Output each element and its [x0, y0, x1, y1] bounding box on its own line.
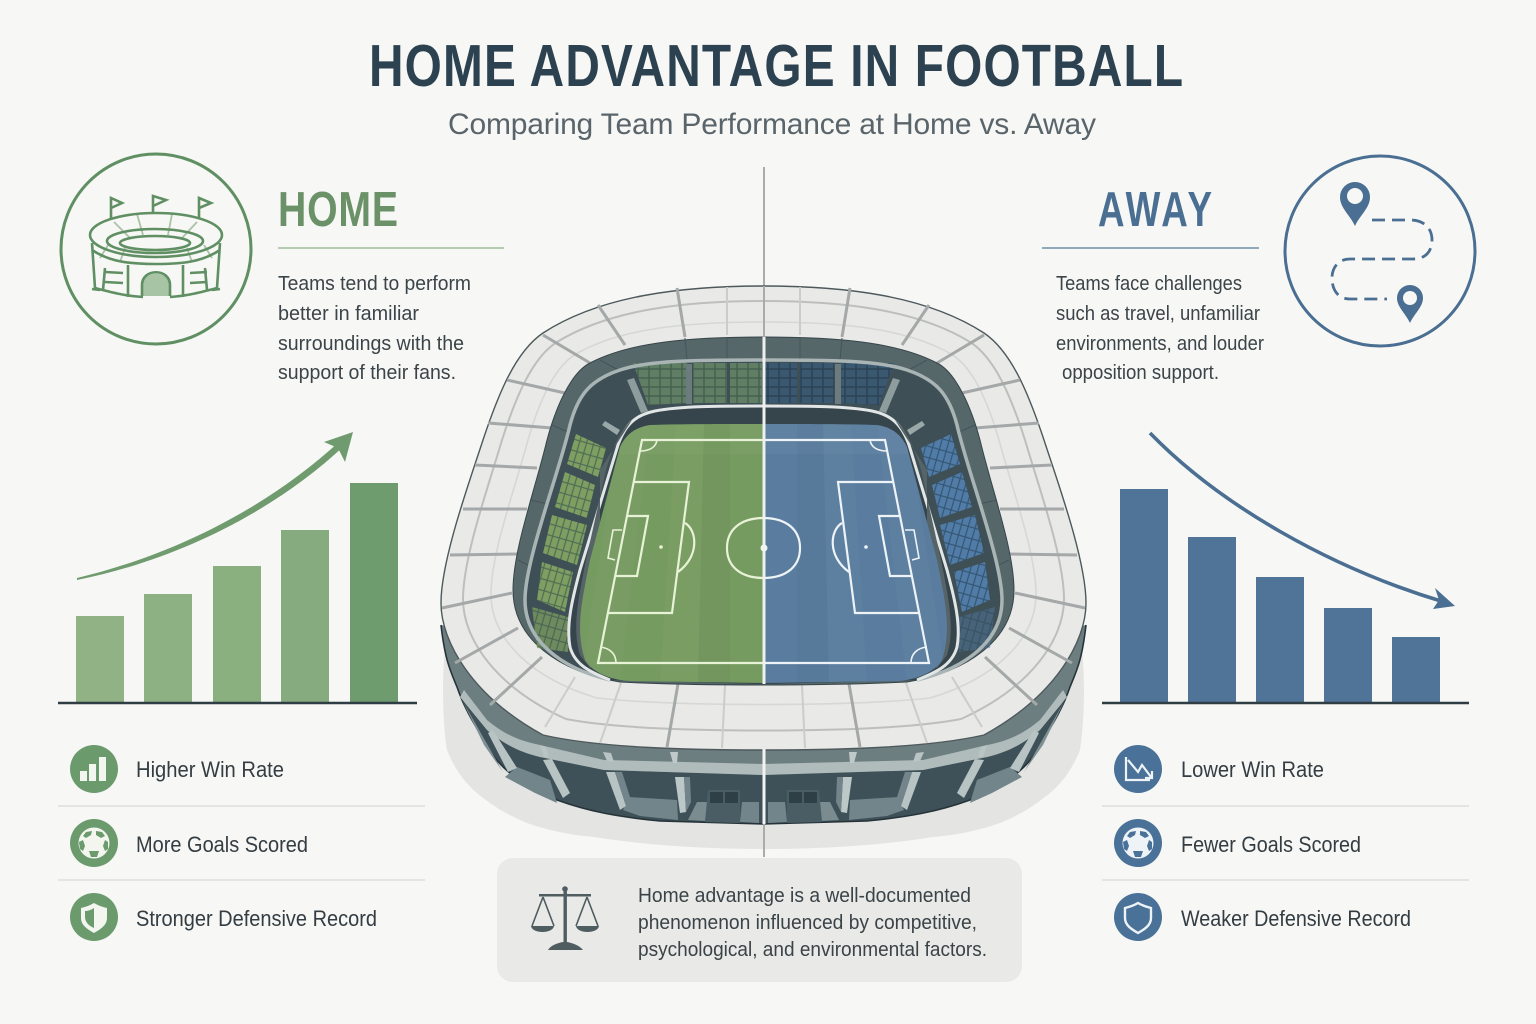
bar chart: rising home performance: [58, 483, 417, 703]
panel: stadium illustration: [441, 286, 1086, 857]
label: weaker defense: Weaker Defensive Record: [1181, 906, 1411, 931]
list: home stats: [58, 745, 425, 941]
label: more goals: More Goals Scored: [136, 832, 308, 857]
text: away description: such as travel, unfamiliar: [1056, 303, 1260, 325]
blue away half of pitch: [757, 424, 947, 684]
heading: away: AWAY: [1098, 183, 1212, 237]
green home seating: [532, 363, 762, 652]
text: summary: phenomenon influenced by competitive,: [638, 912, 977, 934]
text: summary: psychological, and environmental factors.: [638, 939, 987, 961]
arrow: falling trend: [1150, 433, 1455, 609]
icon: weaker defense: [1114, 893, 1162, 941]
text: home description: [278, 273, 471, 384]
text: summary: [638, 885, 987, 961]
inner rail left: [525, 360, 764, 684]
callout: summary: [497, 858, 1022, 982]
label: stronger defense: Stronger Defensive Record: [136, 906, 377, 931]
inner rail right: [763, 360, 1002, 684]
text: away description: Teams face challenges: [1056, 273, 1242, 295]
text: away description: environments, and louder: [1056, 333, 1264, 355]
bar chart: falling away performance: [1102, 489, 1469, 703]
list: away stats: [1102, 745, 1469, 941]
icon: stronger defense: [70, 893, 118, 941]
label: higher win rate: Higher Win Rate: [136, 757, 284, 782]
center line over stadium: [760, 286, 768, 857]
icon: fewer goals: [1114, 819, 1162, 867]
label: fewer goals: Fewer Goals Scored: [1181, 832, 1361, 857]
divider: [278, 247, 504, 249]
text: summary: Home advantage is a well-documented: [638, 885, 971, 907]
arrow: rising trend: [77, 432, 353, 580]
icon: balance scales: [531, 886, 599, 950]
icon: travel route in circle: [1285, 156, 1475, 346]
icon: higher win rate: [70, 745, 118, 793]
text: away description: [1056, 273, 1264, 384]
stadium structure right half: [763, 286, 1086, 849]
text: home description: Teams tend to perform: [278, 273, 471, 295]
icon: more goals: [70, 819, 118, 867]
stadium structure left half: [441, 286, 764, 849]
blue away seating: [765, 363, 995, 652]
text: away description: opposition support.: [1062, 362, 1219, 384]
icon: lower win rate: [1114, 745, 1162, 793]
panel: away: [1042, 156, 1475, 941]
center divider line: [763, 167, 765, 857]
panel: home: [58, 154, 504, 941]
label: lower win rate: Lower Win Rate: [1181, 757, 1324, 782]
title: HOME ADVANTAGE IN FOOTBALL: [369, 33, 1183, 99]
green home half of pitch: [580, 424, 770, 684]
icon: stadium in circle: [61, 154, 251, 344]
text: home description: support of their fans.: [278, 362, 456, 384]
heading: home: HOME: [278, 183, 398, 237]
text: home description: better in familiar: [278, 303, 419, 325]
divider: [1042, 247, 1259, 249]
subtitle: Comparing Team Performance at Home vs. Away: [448, 108, 1096, 141]
text: home description: surroundings with the: [278, 333, 464, 355]
